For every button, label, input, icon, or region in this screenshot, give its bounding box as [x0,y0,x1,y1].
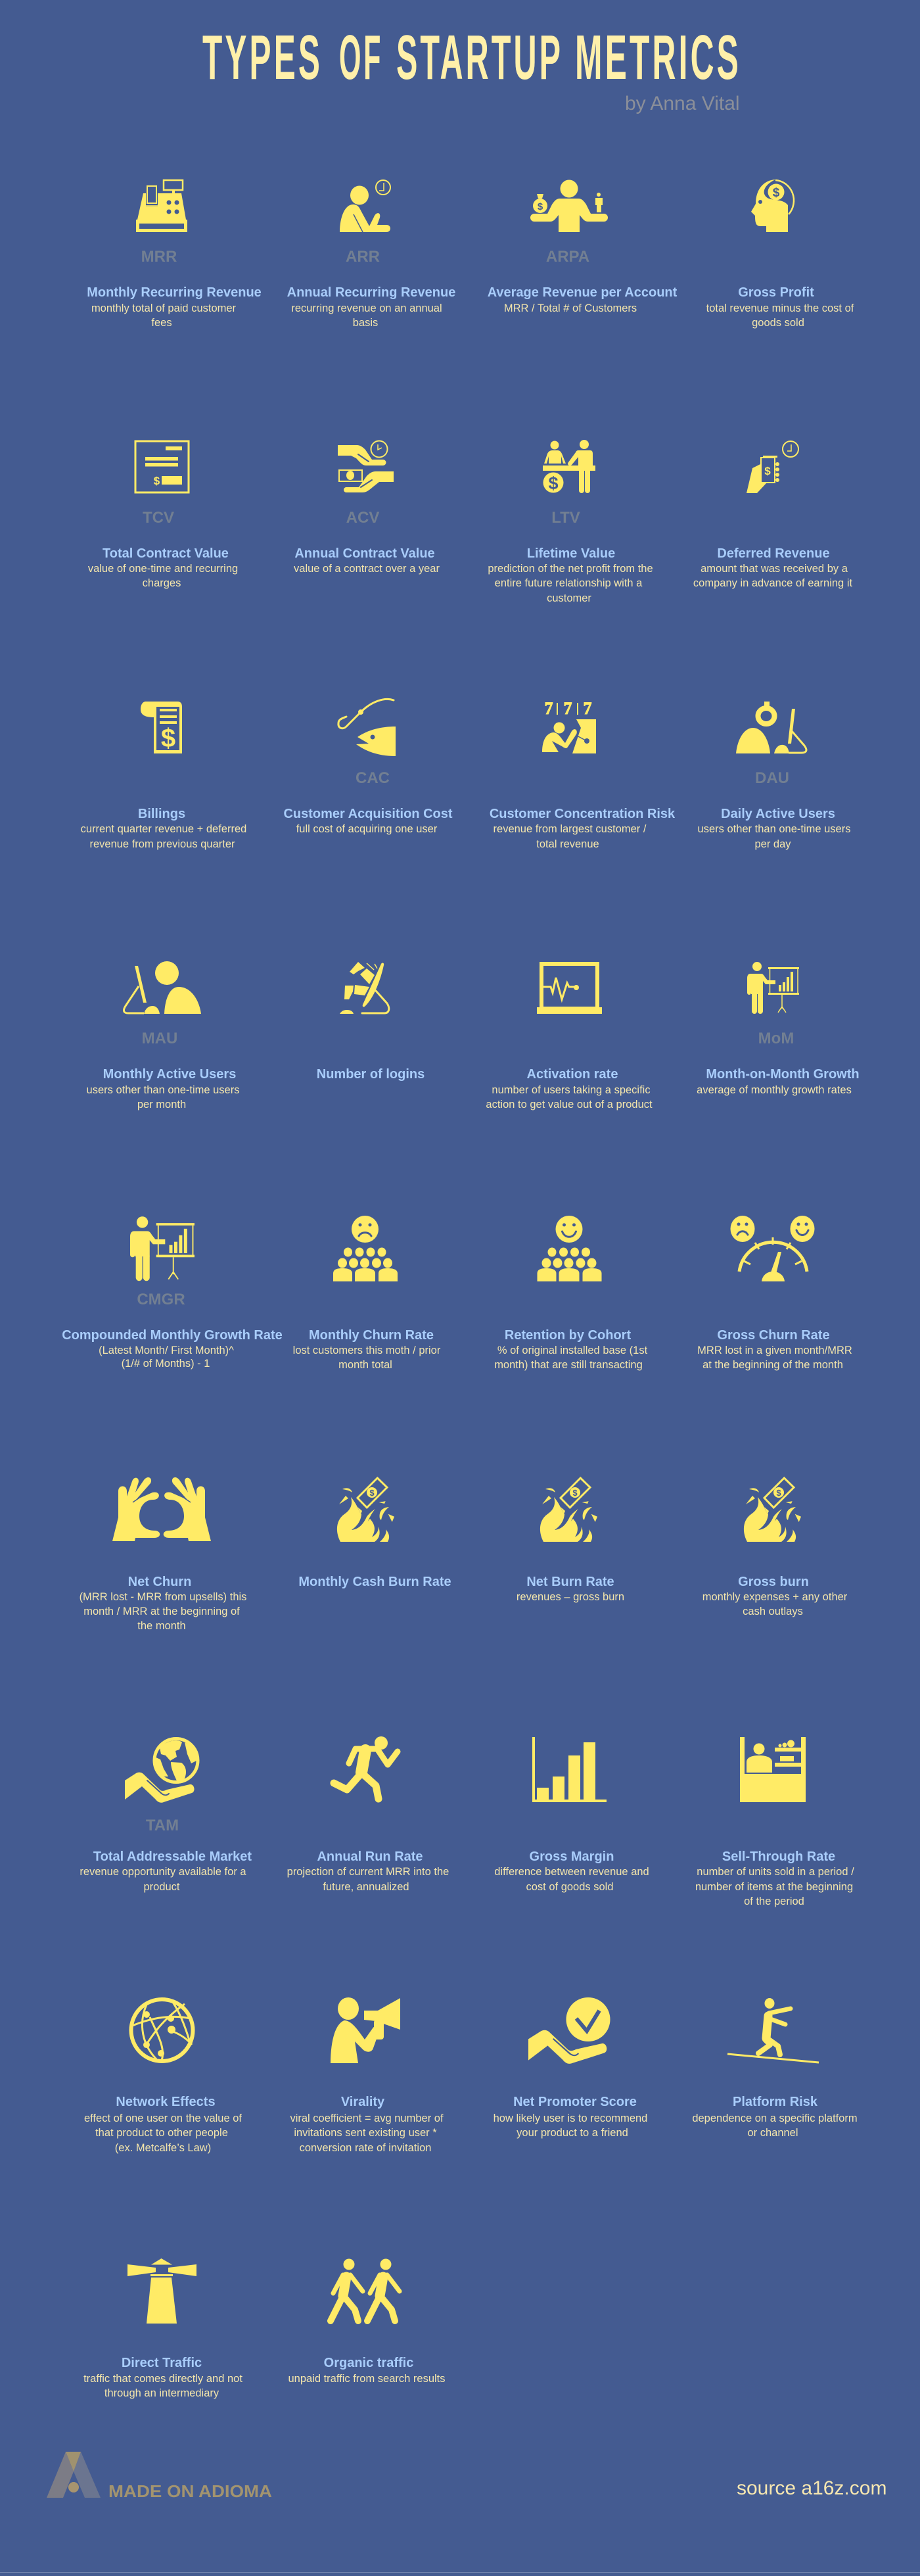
icon: hand with check mark [528,1997,610,2064]
heading: Total Contract Value [103,546,229,561]
heading: Monthly Churn Rate [309,1328,434,1343]
icon: person with megaphone [331,1997,400,2063]
metric: Compounded Monthly Growth Rate [62,1216,283,1370]
icon: presenter with chart [747,962,799,1014]
title: METRICS [575,22,741,93]
description: (ex. Metcalfe’s Law) [115,2142,211,2154]
icon: person at slot machine: 7 [544,699,553,718]
description: % of original installed base (1st [497,1345,648,1356]
heading: Sell-Through Rate [722,1849,835,1864]
acronym: MAU [142,1030,177,1047]
metric: Monthly Cash Burn Rate [298,1478,451,1589]
icon: head thinking of money: $ [773,186,780,200]
icon: person on tightrope [727,1998,819,2063]
acronym: LTV [551,509,580,527]
heading: Monthly Recurring Revenue [87,285,262,300]
icon: two walking people [331,2259,400,2321]
description: total revenue [536,838,599,850]
description: revenue opportunity available for a [80,1866,246,1878]
heading: Month-on-Month Growth [706,1067,860,1082]
icon: person with clock [340,180,390,232]
icon: sad face and audience [333,1216,398,1281]
description: entire future relationship with a [495,577,643,589]
acronym: TCV [143,509,174,527]
description: value of a contract over a year [294,563,440,575]
description: revenue from largest customer / [494,823,647,835]
icon: teller and customer at counter [543,440,595,493]
description: prediction of the net profit from the [488,563,653,575]
icon: computer and user [124,961,201,1014]
heading: Total Addressable Market [93,1849,252,1864]
description: the month [137,1620,186,1632]
heading: Customer Concentration Risk [490,807,676,821]
icon: gauge with sad and happy faces [731,1216,815,1281]
description: effect of one user on the value of [84,2112,242,2124]
metric: Number of logins [317,962,425,1082]
description: charges [143,577,181,589]
description: your product to a friend [517,2127,628,2139]
icon: hand holding globe [125,1738,198,1803]
heading: Direct Traffic [122,2356,202,2370]
icon: contract document: $ [154,475,160,487]
heading: Daily Active Users [721,807,835,821]
description: (MRR lost - MRR from upsells) this [80,1591,246,1603]
title: TYPES [202,22,323,93]
metric: Daily Active Users [698,702,850,850]
description: or channel [747,2127,798,2139]
description: users other than one-time users [698,823,850,835]
icon: person balancing money and user: $ [538,201,543,212]
metric: Total Addressable Market [80,1738,252,1893]
description: revenue from previous quarter [89,838,235,850]
icon: happy face and audience [538,1216,602,1281]
description: of the period [744,1896,804,1907]
metric: Annual Recurring Revenue [287,180,455,329]
heading: Network Effects [116,2095,216,2109]
icon: contract document [135,441,189,492]
metric: Monthly Recurring Revenue [87,180,262,329]
description: per day [754,838,791,850]
description: dependence on a specific platform [692,2112,858,2124]
metric: Monthly Active Users [87,961,239,1110]
footer: Made on Adioma: MADE ON ADIOMA [108,2481,272,2501]
description: monthly expenses + any other [702,1591,848,1603]
description: cost of goods sold [526,1881,614,1893]
acronym: MRR [141,248,177,266]
icon: lighthouse [127,2258,196,2324]
heading: Organic traffic [324,2356,413,2370]
description: monthly total of paid customer [91,302,237,314]
heading: Net Promoter Score [513,2095,637,2109]
icon: person balancing money and user [530,180,608,232]
heading: Number of logins [317,1067,425,1082]
logo: Adioma mark [47,2452,101,2498]
metric: Gross burn [702,1478,848,1617]
description: at the beginning of the month [702,1359,843,1371]
icon: teller and customer at counter: $ [548,473,559,493]
description: per month [137,1099,186,1110]
description: number of items at the beginning [695,1881,853,1893]
icon: billing scroll [141,702,182,753]
title: OF [339,22,383,93]
metric: Average Revenue per Account [488,180,678,314]
metric: Billings [81,702,246,850]
heading: Customer Acquisition Cost [283,807,453,821]
description: conversion rate of invitation [300,2142,431,2154]
metric: Gross Churn Rate [697,1216,852,1371]
description: value of one-time and recurring [88,563,238,575]
heading: Activation rate [527,1067,618,1082]
heading: Annual Run Rate [317,1849,423,1864]
heading: Monthly Cash Burn Rate [298,1575,451,1589]
description: projection of current MRR into the [287,1866,449,1878]
icon: money burning: $ [369,1488,375,1498]
title: STARTUP [396,22,563,93]
acronym: ARPA [546,248,589,266]
heading: Annual Recurring Revenue [287,285,455,300]
heading: Deferred Revenue [717,546,830,561]
metric: Activation rate [486,964,653,1110]
heading: Compounded Monthly Growth Rate [62,1328,283,1343]
icon: money burning [744,1478,801,1542]
description: users other than one-time users [87,1084,239,1096]
description: total revenue minus the cost of [706,302,854,314]
icon: network globe [131,1999,193,2061]
description: revenues – gross burn [517,1591,624,1603]
heading: Net Churn [128,1575,191,1589]
icon: user at computer [736,702,806,753]
description: average of monthly growth rates [697,1084,852,1096]
description: unpaid traffic from search results [288,2373,446,2385]
icon: hand holding money with clock [747,441,798,493]
icon: cash register [136,180,187,232]
metric: Gross Margin [494,1737,649,1893]
description: customer [547,592,591,604]
heading: Gross burn [738,1575,809,1589]
heading: Gross Profit [738,285,814,300]
metric: Net Burn Rate [517,1478,624,1603]
heading: Monthly Active Users [103,1067,236,1082]
metric: Retention by Cohort [494,1216,648,1371]
footer: source: source a16z.com [737,2477,886,2499]
description: product [143,1881,180,1893]
metric: Customer Acquisition Cost [283,699,453,835]
icon: monitor with pulse [537,964,602,1014]
description: (Latest Month/ First Month)^ [99,1345,234,1356]
heading: Net Burn Rate [526,1575,614,1589]
heading: Virality [341,2095,385,2109]
heading: Platform Risk [733,2095,818,2109]
description: basis [353,317,378,329]
icon: shop counter [740,1737,806,1802]
acronym: TAM [146,1817,179,1834]
acronym: DAU [755,769,789,787]
description: fees [151,317,172,329]
metric: Sell-Through Rate [695,1737,854,1907]
metric: Gross Profit [706,179,854,329]
description: month) that are still transacting [494,1359,643,1371]
icon: money burning: $ [776,1488,781,1498]
icon: running person [334,1736,398,1799]
description: traffic that comes directly and not [83,2373,242,2385]
description: current quarter revenue + deferred [81,823,246,835]
metric: Organic traffic [288,2259,446,2385]
description: invitations sent existing user * [294,2127,437,2139]
description: month total [338,1359,392,1371]
description: goods sold [752,317,804,329]
description: number of users taking a specific [492,1084,651,1096]
heading: Gross Margin [530,1849,614,1864]
description: viral coefficient = avg number of [290,2112,444,2124]
metric: Deferred Revenue [693,441,852,589]
icon: person at slot machine: 7 [564,699,572,718]
metric: Net Promoter Score [494,1997,647,2139]
metric: Direct Traffic [83,2258,242,2399]
description: that product to other people [95,2127,228,2139]
icon: billing scroll: $ [161,724,175,753]
description: cash outlays [743,1606,803,1617]
metric: Monthly Churn Rate [293,1216,441,1371]
metric: Virality [290,1997,444,2154]
heading: Average Revenue per Account [488,285,678,300]
icon: person at slot machine: 7 [584,699,591,718]
subtitle: by Anna Vital: by Anna Vital [625,93,740,114]
icon: person at slot machine [542,699,596,753]
icon: fish and hook [338,699,396,756]
acronym: MoM [758,1030,794,1047]
icon: head thinking of money [751,179,794,232]
heading: Annual Contract Value [294,546,435,561]
metric: Customer Concentration Risk [490,699,676,850]
metric: Platform Risk [692,1998,858,2139]
metric: Lifetime Value [488,440,653,604]
icon: bar chart [532,1737,607,1802]
heading: Lifetime Value [527,546,615,561]
description: future, annualized [323,1881,409,1893]
icon: money burning [540,1478,597,1542]
acronym: CAC [356,769,390,787]
title [202,22,741,93]
icon: money burning: $ [572,1488,578,1498]
metric: Total Contract Value [88,441,238,589]
heading: Retention by Cohort [505,1328,631,1343]
description: MRR / Total # of Customers [504,302,637,314]
metric: Network Effects [84,1999,242,2154]
description: company in advance of earning it [693,577,852,589]
icon: hand holding money with clock: $ [764,465,771,477]
heading: Billings [138,807,185,821]
metric: Month-on-Month Growth [697,962,860,1096]
description: (1/# of Months) - 1 [122,1358,210,1370]
heading: Gross Churn Rate [717,1328,830,1343]
icon: smashing computer [340,962,389,1014]
metric: Annual Contract Value [294,441,440,575]
acronym: ARR [346,248,380,266]
icon: presenter with chart [130,1216,195,1281]
acronym: CMGR [137,1291,185,1308]
metric: Net Churn [80,1477,246,1632]
description: MRR lost in a given month/MRR [697,1345,852,1356]
description: action to get value out of a product [486,1099,653,1110]
icon: hands exchanging money and time [338,441,394,492]
description: difference between revenue and [494,1866,649,1878]
description: amount that was received by a [701,563,848,575]
description: lost customers this moth / prior [293,1345,441,1356]
description: month / MRR at the beginning of [83,1606,240,1617]
icon: money burning [337,1478,394,1542]
icon: two hands pinching [112,1477,211,1541]
description: number of units sold in a period / [697,1866,854,1878]
description: how likely user is to recommend [494,2112,647,2124]
metric: Annual Run Rate [287,1736,449,1893]
acronym: ACV [346,509,379,527]
description: through an intermediary [104,2387,219,2399]
description: full cost of acquiring one user [296,823,438,835]
description: recurring revenue on an annual [291,302,442,314]
